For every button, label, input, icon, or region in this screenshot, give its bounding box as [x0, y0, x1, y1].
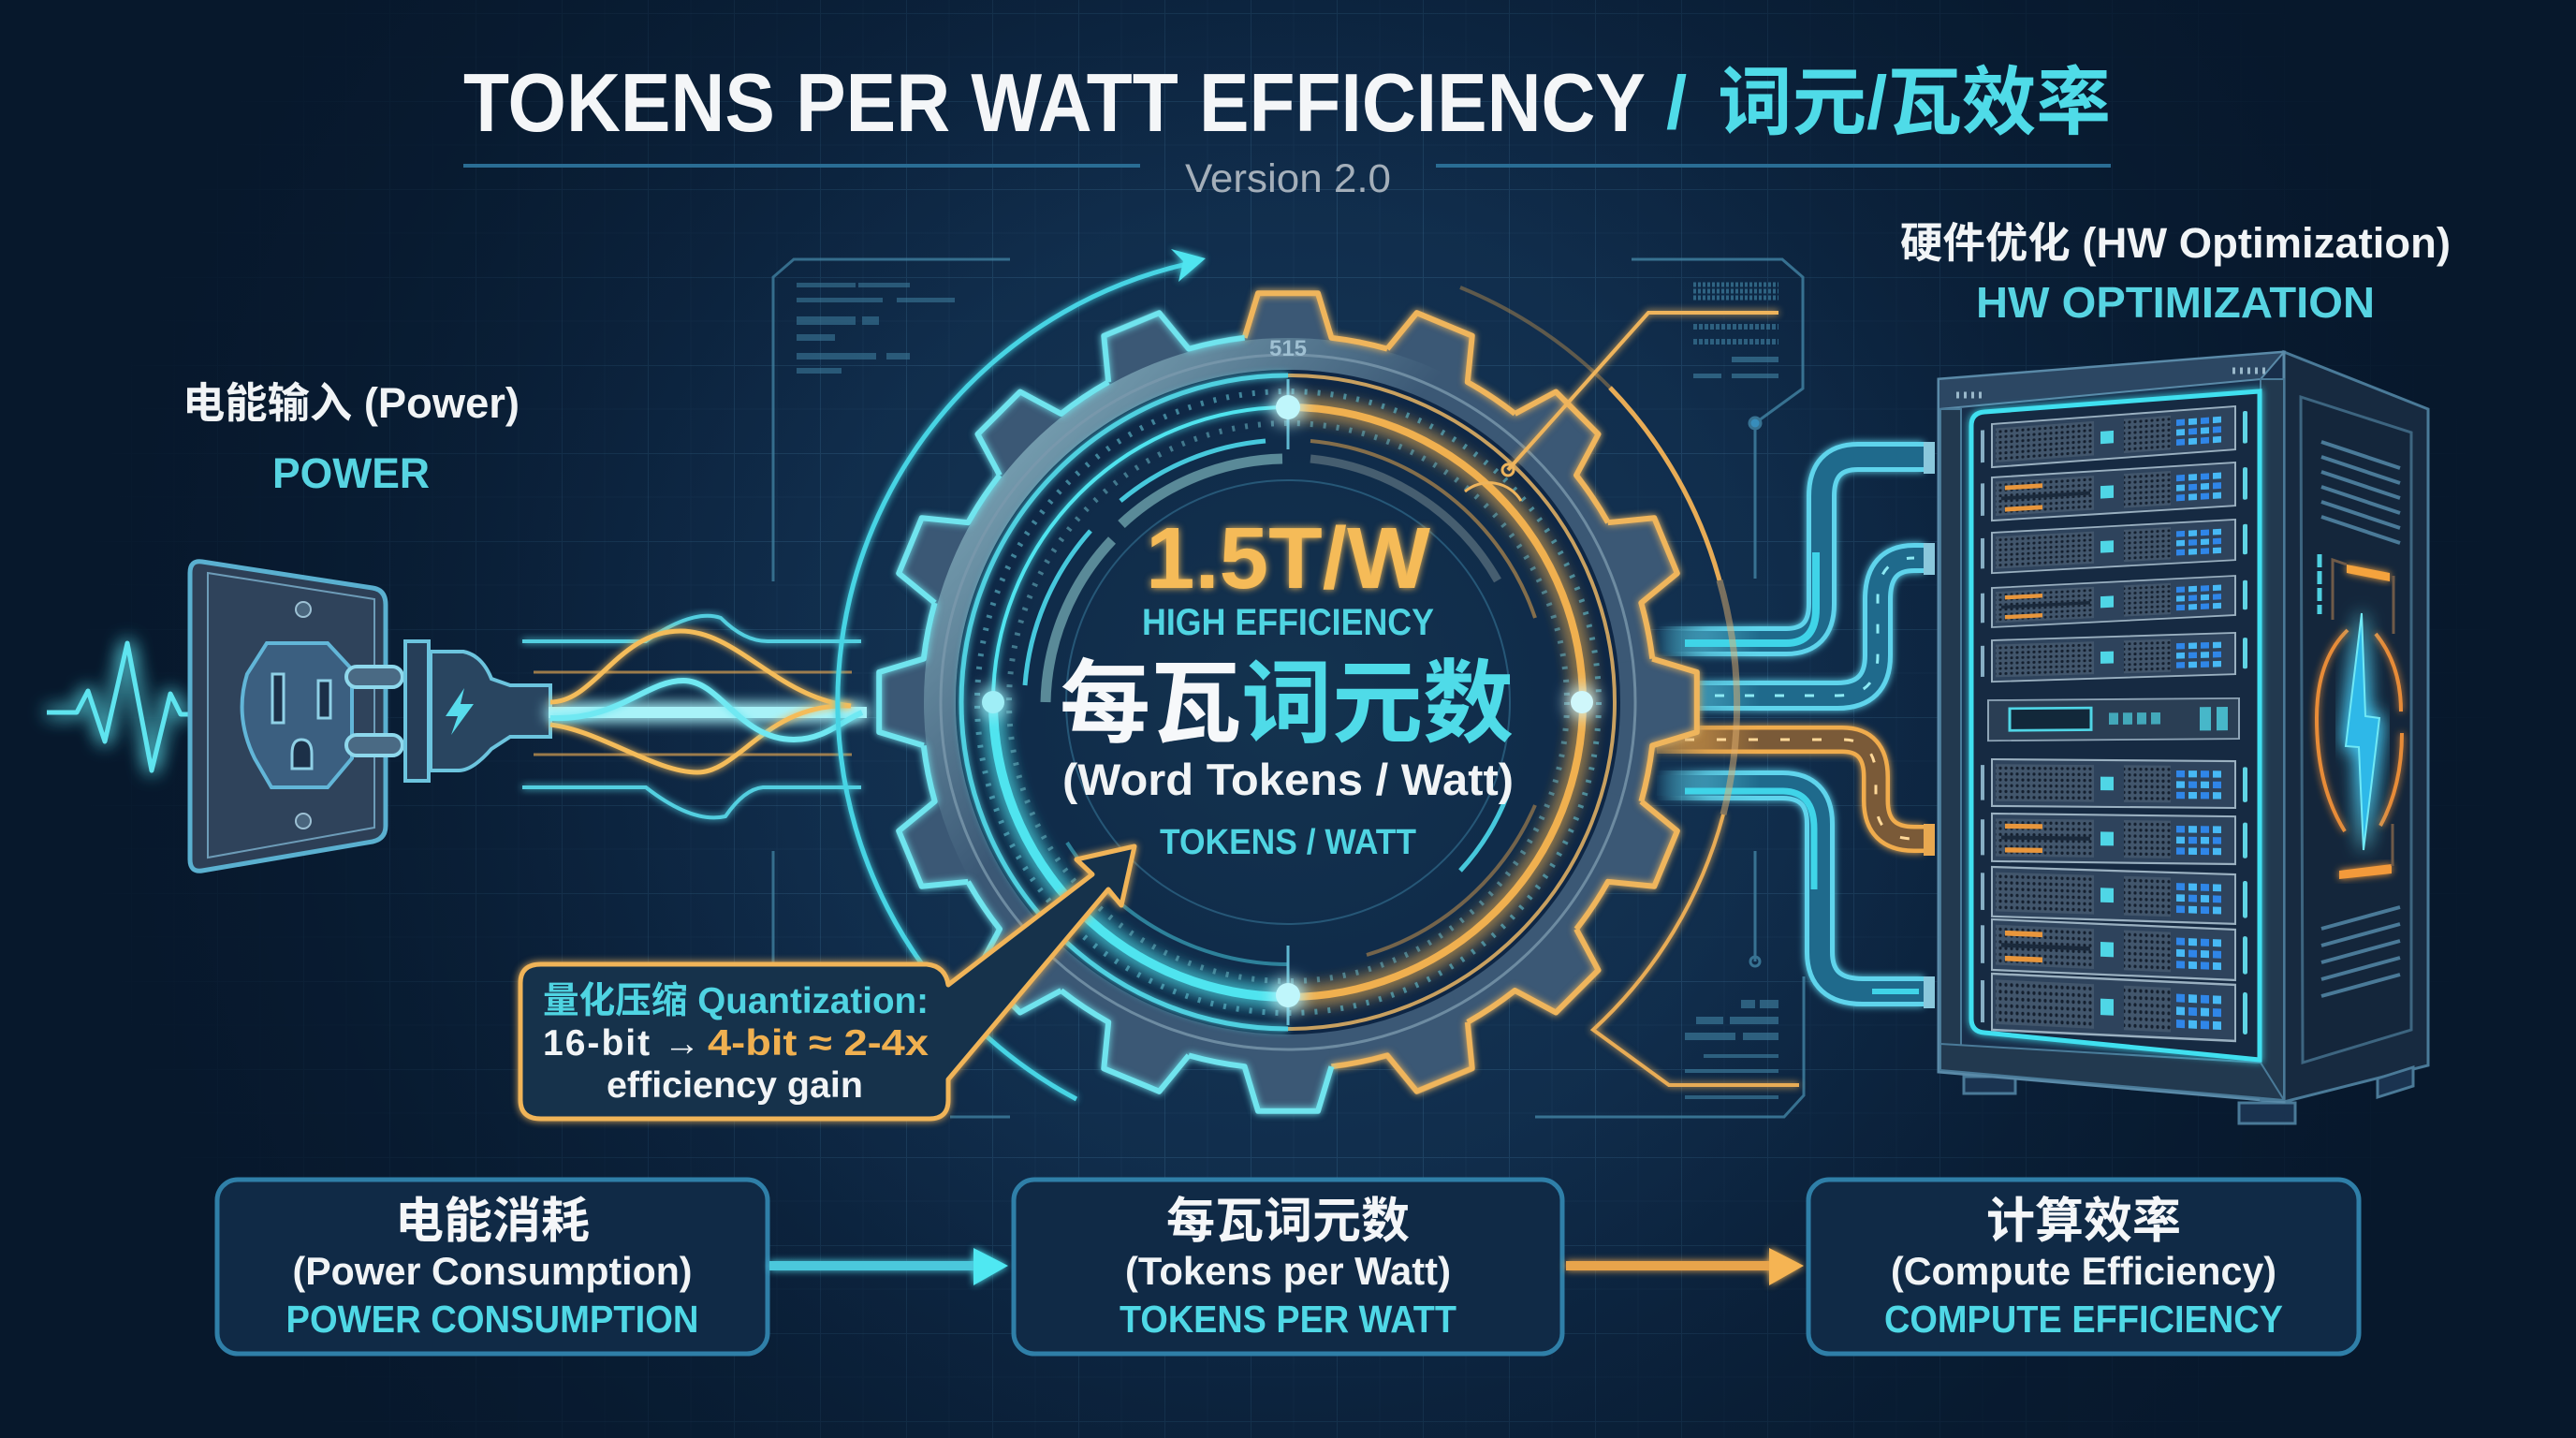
flow box: tokens per watt: (Tokens per Watt): [1125, 1249, 1451, 1293]
server units: [1981, 405, 2247, 1042]
rack top bar: [1939, 352, 2284, 409]
title: /: [1666, 61, 1687, 144]
label: power input: POWER: [272, 449, 430, 497]
pipe 2: [1657, 558, 1924, 696]
pipe connectors: [1924, 442, 1935, 1008]
gear: [872, 286, 1704, 1118]
panel frames: right HUD: [1535, 259, 1804, 1117]
display unit: [1988, 698, 2239, 741]
subtitle: version: [463, 156, 2111, 201]
flow box: tokens per watt: [1014, 1180, 1562, 1354]
gear: 515: [1269, 336, 1307, 361]
pipe 3: [1657, 740, 1924, 839]
rack feet: [1964, 1067, 2413, 1123]
callout text: [543, 981, 929, 1106]
outer arc with arrow: [838, 249, 1206, 1099]
label: hardware optimization: 硬件优化 (HW Optimization): [1900, 219, 2451, 267]
label: power input: 电能输入 (Power): [183, 379, 520, 427]
flow box: power consumption: POWER CONSUMPTION: [286, 1298, 698, 1341]
flow box: power consumption: 电能消耗: [395, 1195, 590, 1249]
ring nodes: [982, 395, 1593, 1007]
flow box: compute efficiency: 计算效率: [1986, 1195, 2181, 1249]
dotted tick rings: [977, 391, 1599, 1013]
pipe 4: [1657, 785, 1924, 991]
flow box: compute efficiency: [1808, 1180, 2359, 1354]
callout box with arrow: [520, 846, 1134, 1119]
rack front: [1939, 352, 2284, 1102]
rack inner glow frame: [1971, 391, 2260, 1060]
flow box: power consumption: (Power Consumption): [292, 1249, 693, 1293]
rack side panel: [2284, 352, 2428, 1102]
title: 词元/瓦效率: [1718, 61, 2111, 144]
callout text: 16-bit →: [543, 1023, 700, 1064]
icon: plug: [346, 641, 550, 781]
callout text: 4-bit ≈ 2-4x: [708, 1023, 929, 1064]
icon: heartbeat pulse: [47, 643, 190, 770]
subtitle: version: Version 2.0: [1185, 156, 1391, 201]
server rack: [1939, 352, 2428, 1123]
label: hardware optimization: HW OPTIMIZATION: [1976, 278, 2375, 327]
callout text: efficiency gain: [607, 1065, 863, 1106]
center metric text: HIGH EFFICIENCY: [1142, 602, 1434, 643]
center metric text: 词元数: [1241, 653, 1514, 755]
flow box: compute efficiency: (Compute Efficiency): [1891, 1249, 2276, 1293]
flow box: tokens per watt: TOKENS PER WATT: [1120, 1298, 1456, 1341]
outer orange arc and leader: [1460, 287, 1799, 1085]
label: power input: [183, 379, 520, 497]
center metric text: 1.5T/W: [1146, 509, 1430, 607]
label: hardware optimization: [1900, 219, 2451, 327]
right pipes: [1657, 442, 1935, 1008]
arrow: cyan flow: [769, 1248, 1008, 1285]
pipe 1: [1657, 457, 1924, 643]
center metric text: (Word Tokens / Watt): [1062, 755, 1514, 804]
center metric text: 每瓦: [1060, 653, 1241, 755]
energy wires: [522, 616, 867, 817]
progress ring: [977, 379, 1599, 1025]
center metric text: TOKENS / WATT: [1160, 823, 1416, 862]
inner arcs left: [1120, 441, 1266, 501]
icon: wall outlet: [190, 562, 386, 871]
flow box: tokens per watt: 每瓦词元数: [1166, 1195, 1410, 1249]
rack pillars: [1940, 379, 2284, 1100]
title: TOKENS PER WATT EFFICIENCY: [463, 56, 1646, 149]
flow box: power consumption: [217, 1180, 768, 1354]
flow box: compute efficiency: COMPUTE EFFICIENCY: [1884, 1298, 2283, 1341]
arrow: orange flow: [1566, 1248, 1804, 1285]
panel frames: left HUD: [773, 259, 1010, 1117]
inner arcs right: [1310, 441, 1535, 618]
callout text: 量化压缩 Quantization:: [543, 981, 929, 1021]
callout: quantization: [520, 846, 1134, 1119]
center metric text: [1060, 509, 1514, 862]
